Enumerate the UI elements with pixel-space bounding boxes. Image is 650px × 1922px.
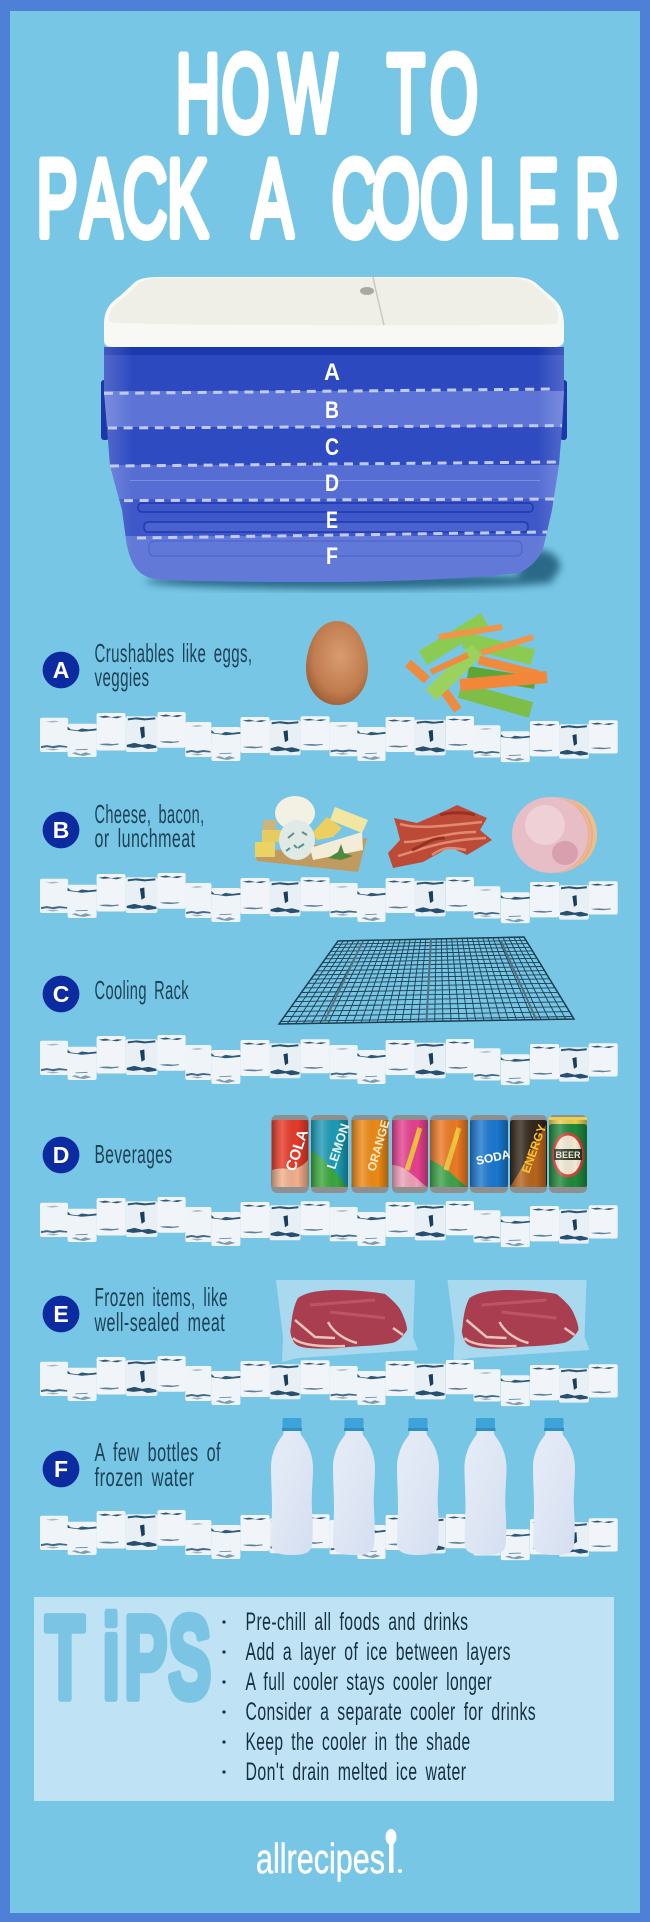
row C [40, 937, 618, 1085]
can: lemon [311, 1115, 352, 1193]
title [36, 31, 619, 259]
tips list: A full cooler stays cooler longer [246, 1668, 492, 1696]
ice row D [40, 1197, 618, 1247]
label B [94, 799, 204, 853]
tips list: Pre-chill all foods and drinks [246, 1608, 468, 1636]
ice row B [40, 873, 618, 923]
cooler layer letters: B [325, 397, 339, 424]
can: beer: BEER [555, 1150, 581, 1160]
ice row F [40, 1510, 618, 1560]
row A [40, 620, 618, 762]
badge F: F [54, 1456, 68, 1482]
cooler layer letters: C [325, 434, 339, 461]
title: PACK A COOLER [36, 136, 619, 259]
can: energy: ENERGY [519, 1123, 549, 1175]
label E: Frozen items, like [94, 1282, 228, 1312]
label A: Crushables like eggs, [94, 638, 252, 668]
badge B: B [53, 817, 69, 843]
badge D [43, 1137, 79, 1173]
ice row C [40, 1035, 618, 1085]
row E [40, 1280, 618, 1406]
tips list [222, 1608, 536, 1786]
icon: cheese board [255, 796, 368, 872]
badge C: C [53, 981, 69, 1007]
badge B [43, 812, 79, 848]
badge F [43, 1451, 79, 1487]
can: orange: ORANGE [364, 1118, 392, 1173]
icon: bacon [388, 805, 492, 868]
tips heading: TiPS [45, 1593, 211, 1724]
can: beer [549, 1115, 587, 1193]
label F [94, 1437, 221, 1492]
can: lemon: LEMON [324, 1122, 352, 1171]
can: cola [272, 1115, 312, 1193]
can: cola: COLA [283, 1127, 312, 1173]
label E [94, 1282, 228, 1337]
ice row A [40, 712, 618, 762]
ice row E [40, 1356, 618, 1406]
label A: veggies [94, 662, 150, 692]
title: HOW TO [176, 31, 478, 154]
icon: beverage cans [272, 1115, 587, 1193]
icon: veggies [408, 620, 547, 710]
badge A: A [53, 657, 69, 683]
label B: or lunchmeat [94, 823, 196, 853]
row F [40, 1418, 618, 1560]
can: orange [352, 1115, 392, 1193]
label A [94, 638, 252, 692]
cooler layer letters: A [324, 359, 340, 386]
cooler layer letters: E [326, 507, 338, 534]
row D [40, 1115, 618, 1247]
panel: tips [34, 1593, 614, 1801]
can: energy [510, 1115, 549, 1193]
can: orange and green [430, 1115, 468, 1193]
cooler lid [104, 277, 564, 347]
tips list: Keep the cooler in the shade [246, 1728, 470, 1756]
cooler body with layer bands [100, 347, 570, 582]
cooler shadow [145, 550, 560, 589]
icon: sealed steak 2 [448, 1280, 590, 1362]
label D: Beverages [94, 1139, 172, 1169]
badge A [43, 652, 79, 688]
label C: Cooling Rack [94, 975, 189, 1005]
row B [40, 796, 618, 923]
icon: ham slices [512, 797, 597, 873]
badge E [43, 1296, 79, 1332]
can: soda: SODA [475, 1147, 512, 1168]
badge C [43, 976, 79, 1012]
label F: A few bottles of [94, 1437, 221, 1467]
label B: Cheese, bacon, [94, 799, 204, 829]
cooler layer letters: F [326, 543, 338, 570]
icon: frozen water bottles [271, 1418, 575, 1555]
cooler layer letters [324, 359, 340, 570]
icon: egg [306, 621, 368, 705]
label E: well-sealed meat [94, 1307, 225, 1337]
badge D: D [53, 1142, 69, 1168]
tips list: Don't drain melted ice water [246, 1758, 466, 1786]
icon: cooling rack [279, 937, 574, 1024]
logo: allrecipes: allrecipes [256, 1835, 385, 1882]
cooler handles [101, 380, 567, 440]
badge E: E [53, 1301, 69, 1327]
can: pink [392, 1115, 428, 1193]
cooler illustration [100, 277, 570, 589]
icon: sealed steak 1 [276, 1280, 418, 1362]
can: soda [470, 1115, 512, 1193]
label F: frozen water [94, 1462, 194, 1492]
cooler layer letters: D [325, 470, 339, 497]
layer divider dashes [104, 389, 562, 538]
